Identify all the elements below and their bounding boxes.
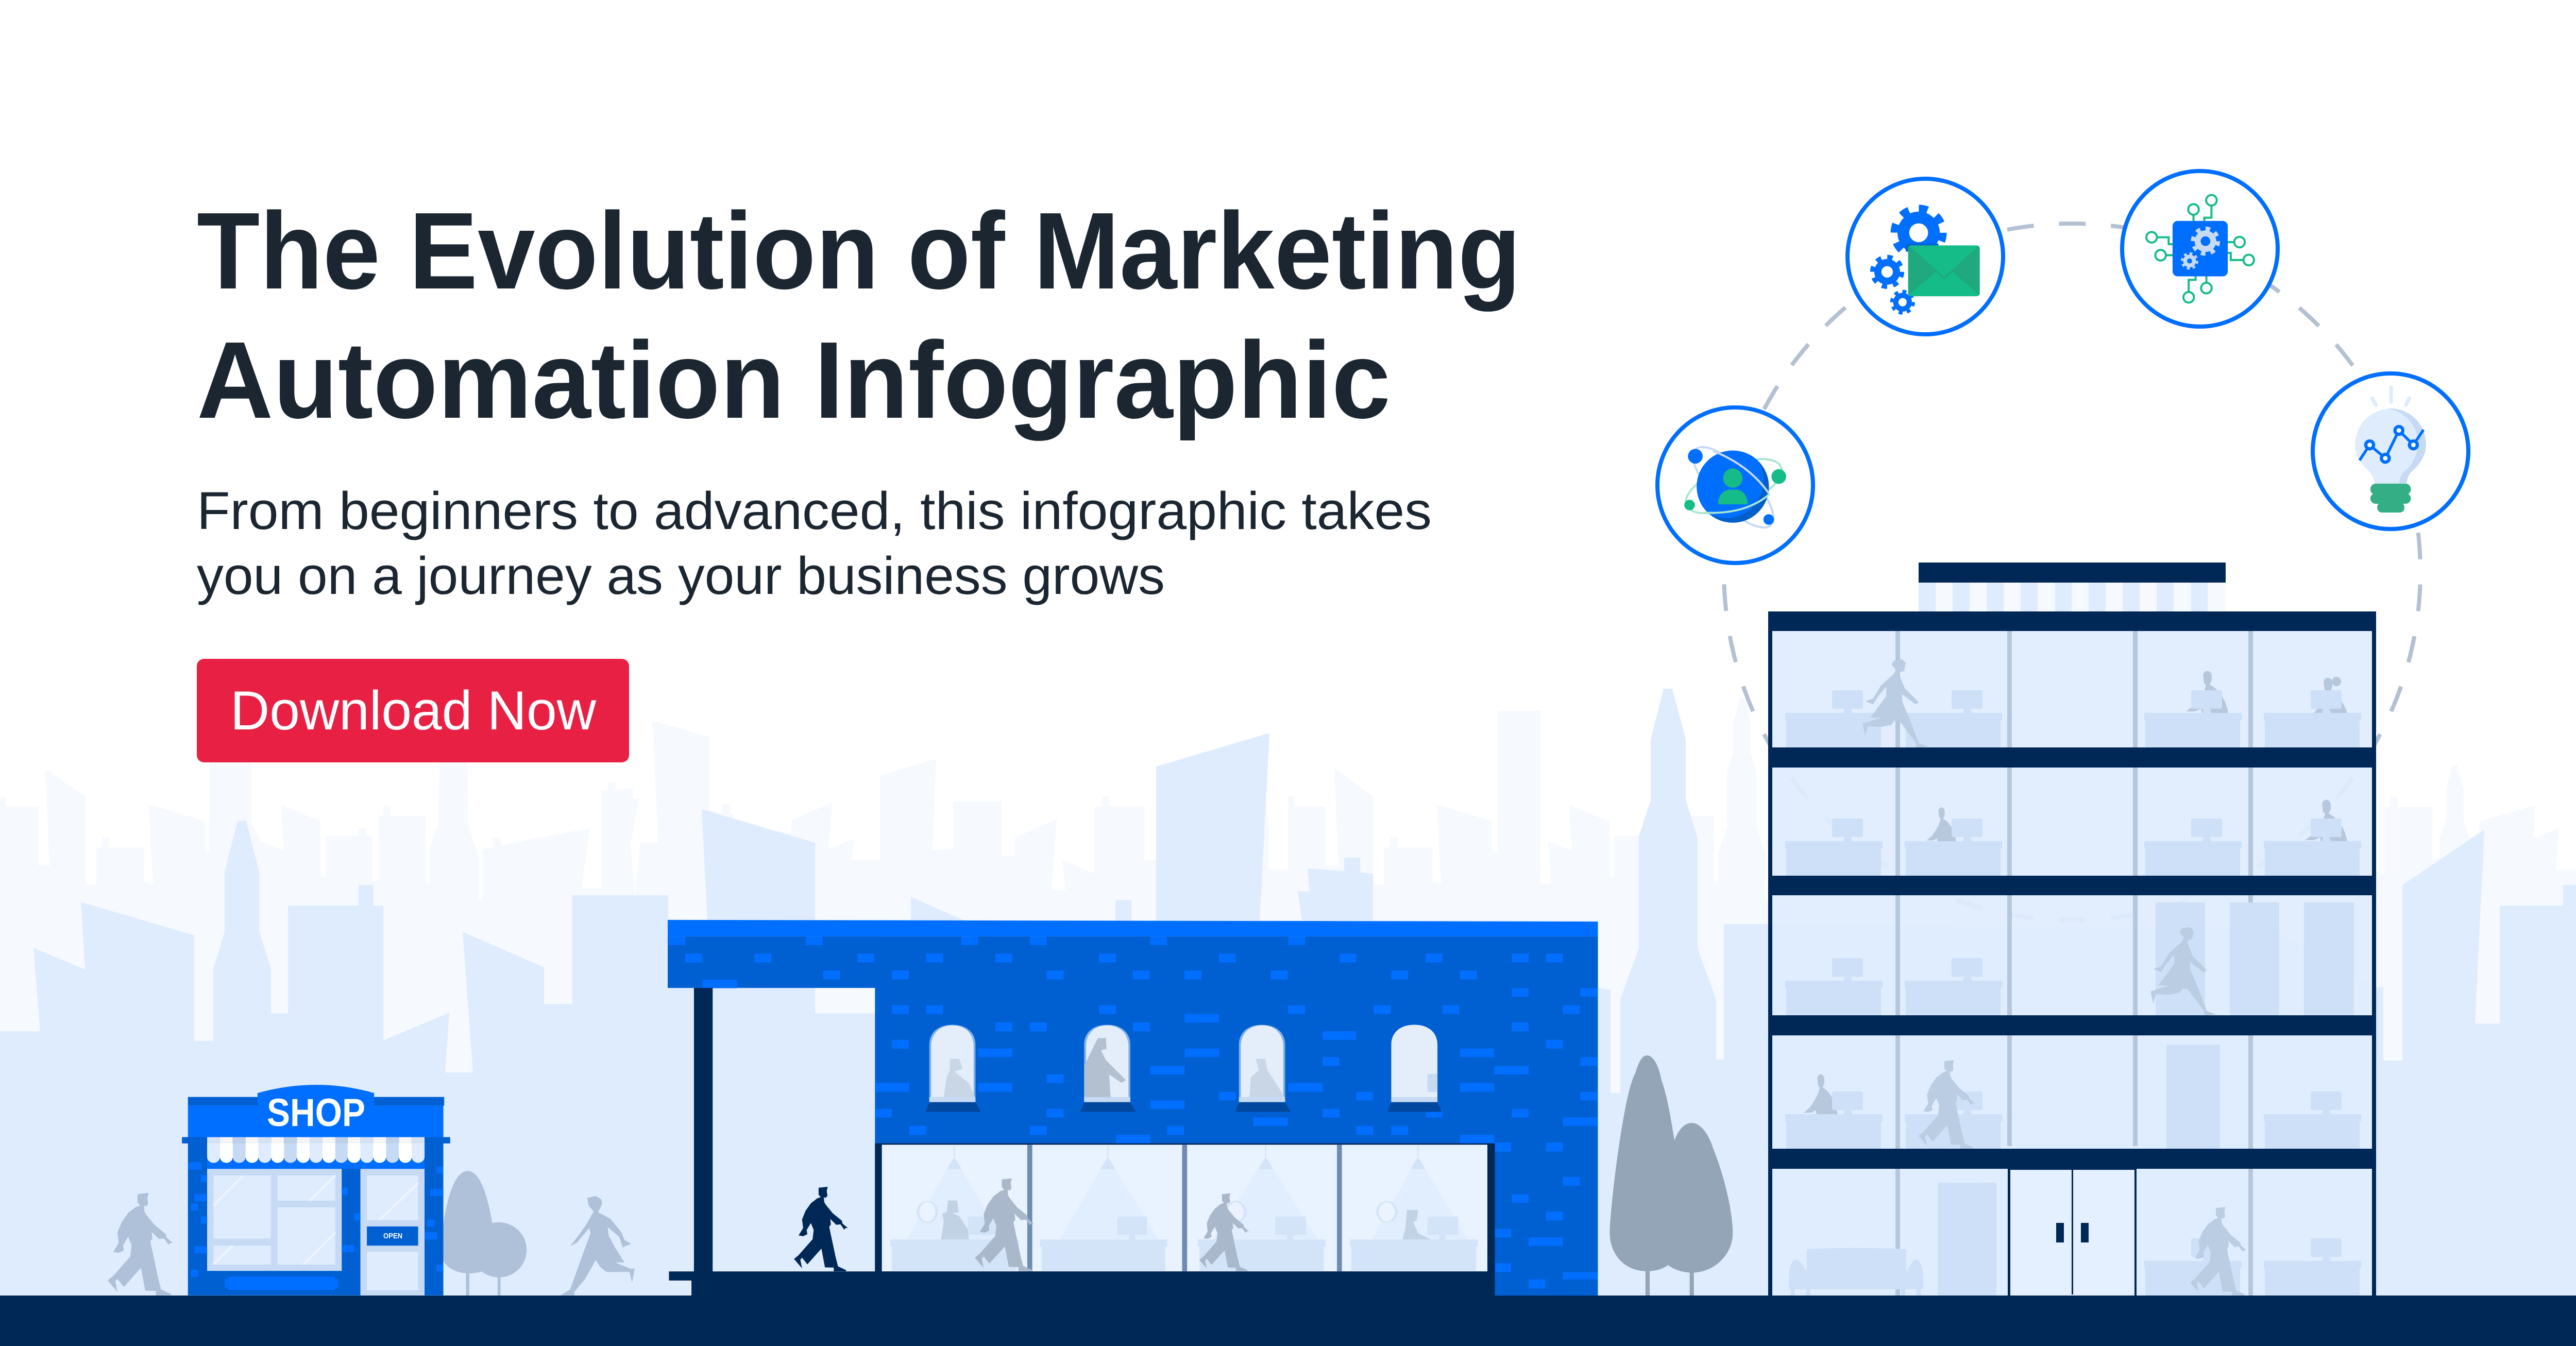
pedestrian left <box>108 1193 173 1296</box>
title: Automation Infographic <box>197 319 1391 441</box>
open sign label: OPEN <box>383 1232 402 1240</box>
mullions <box>1895 631 2253 1296</box>
wall clocks <box>918 1202 1396 1222</box>
corner shop <box>108 1085 635 1296</box>
icon: idea bulb with chart <box>2313 373 2468 529</box>
structure frame <box>1768 611 2376 1296</box>
title <box>197 190 1521 441</box>
walls <box>668 936 1598 1296</box>
icon: person globe <box>1657 407 1813 563</box>
trees beside tall building <box>1609 1055 1733 1296</box>
seated staff <box>1804 671 2349 1114</box>
trees behind shop <box>444 1171 527 1296</box>
shop window and door <box>207 1169 425 1296</box>
ceiling lamps <box>906 1145 1468 1240</box>
tall office building <box>1768 563 2376 1296</box>
title: The Evolution of Marketing <box>197 190 1521 312</box>
city skyline: front layer <box>0 689 2576 1296</box>
glass facade <box>1770 618 2374 1296</box>
desks <box>1785 690 2361 1296</box>
rooftop sign <box>1919 563 2226 611</box>
seated store staff <box>941 1201 1431 1239</box>
store mullions <box>1027 1145 1342 1271</box>
roof strip <box>668 920 1598 936</box>
figure: man walking at entrance <box>794 1187 848 1271</box>
ground <box>0 1296 2576 1346</box>
lobby sofa <box>1789 1248 1923 1296</box>
support pillar and platform <box>669 988 1495 1296</box>
subtitle: you on a journey as your business grows <box>197 546 1165 605</box>
shop walls <box>188 1105 444 1169</box>
shop sign <box>258 1085 374 1113</box>
bricks <box>668 936 1598 1288</box>
shop sign label: SHOP <box>267 1091 365 1135</box>
arched windows <box>925 1025 1442 1112</box>
store desks and monitors <box>890 1216 1478 1271</box>
floor furniture cabinets <box>1938 902 2354 1296</box>
plaque <box>225 1276 338 1290</box>
brick office building <box>668 920 1598 1296</box>
download button <box>197 659 629 762</box>
download button: Download Now <box>230 679 597 741</box>
entrance doors <box>2008 1167 2137 1296</box>
walking staff <box>1862 659 2246 1296</box>
shop bricks <box>189 1162 444 1277</box>
pedestrian right <box>561 1196 635 1296</box>
icon: gears and envelope <box>1848 179 2003 334</box>
city skyline: back layer <box>0 698 2576 1296</box>
people in store <box>975 1179 1249 1271</box>
icon: automation chip <box>2122 171 2278 327</box>
storefront glass <box>875 1143 1495 1272</box>
awning <box>207 1137 425 1163</box>
dashed journey arc <box>1724 224 2420 920</box>
subtitle: From beginners to advanced, this infographic takes <box>197 481 1432 540</box>
subtitle <box>197 481 1432 605</box>
